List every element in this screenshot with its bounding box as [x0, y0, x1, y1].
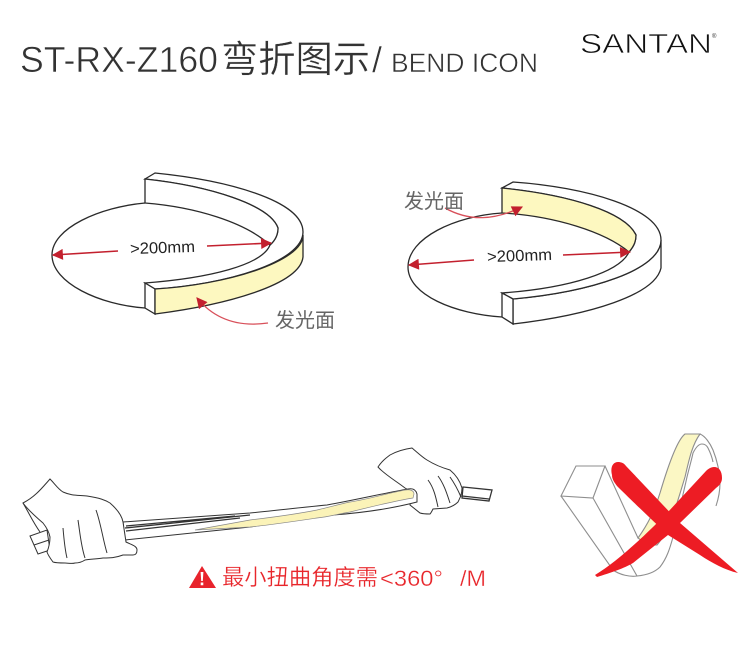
width label: >200mm	[487, 247, 552, 266]
diagram: left ring, light-emitting face outward	[52, 173, 335, 332]
right hand	[378, 448, 462, 514]
ring end face	[502, 293, 513, 324]
yellow light-emitting face	[502, 188, 636, 252]
title	[20, 39, 538, 80]
title: ST-RX-Z160	[20, 39, 218, 80]
yellow strip section	[638, 434, 700, 545]
width arrow left	[53, 251, 118, 255]
callout arrow	[445, 207, 522, 218]
ring outer wall	[513, 240, 661, 324]
diagram: right ring, light-emitting face inward	[404, 182, 661, 324]
right hand finger lines	[428, 476, 461, 507]
diagram: forbidden sharp twist crossed out	[561, 434, 738, 577]
warning text with icon: /M	[460, 566, 486, 591]
grey strip outline	[561, 434, 720, 576]
title: BEND ICON	[391, 48, 538, 78]
width arrow left	[409, 260, 474, 265]
title: 弯折图示	[221, 39, 370, 80]
icon: red cross	[611, 462, 738, 573]
warning text with icon: <360°	[380, 566, 443, 591]
logo: SANTAN: ®	[712, 33, 717, 40]
logo: SANTAN: SANTAN	[580, 28, 712, 59]
callout arrow	[197, 298, 268, 324]
callout label: 发光面	[275, 309, 335, 332]
yellow strip face	[195, 490, 414, 530]
ring end face	[145, 283, 155, 314]
ring band top	[502, 182, 661, 299]
left hand	[23, 479, 137, 563]
warning text with icon: 最小扭曲角度需	[222, 565, 378, 590]
width arrow right	[563, 252, 630, 255]
ring disc outline	[408, 213, 502, 317]
title: /	[372, 39, 382, 80]
ring band top	[145, 173, 303, 289]
dark twist lines	[125, 515, 250, 531]
ring disc outline	[52, 203, 145, 308]
strip stub right	[462, 487, 492, 501]
width arrow right	[207, 243, 271, 246]
yellow light-emitting face	[155, 235, 303, 314]
left hand finger lines	[23, 503, 107, 558]
warning text with icon	[189, 565, 486, 591]
strip body	[123, 489, 417, 540]
callout label: 发光面	[404, 190, 464, 213]
width label: >200mm	[130, 239, 195, 258]
strip stub left	[30, 530, 50, 554]
diagram: twisted strip held by two hands	[23, 448, 492, 563]
ring inner wall	[145, 179, 278, 245]
icon: warning triangle	[189, 566, 216, 588]
